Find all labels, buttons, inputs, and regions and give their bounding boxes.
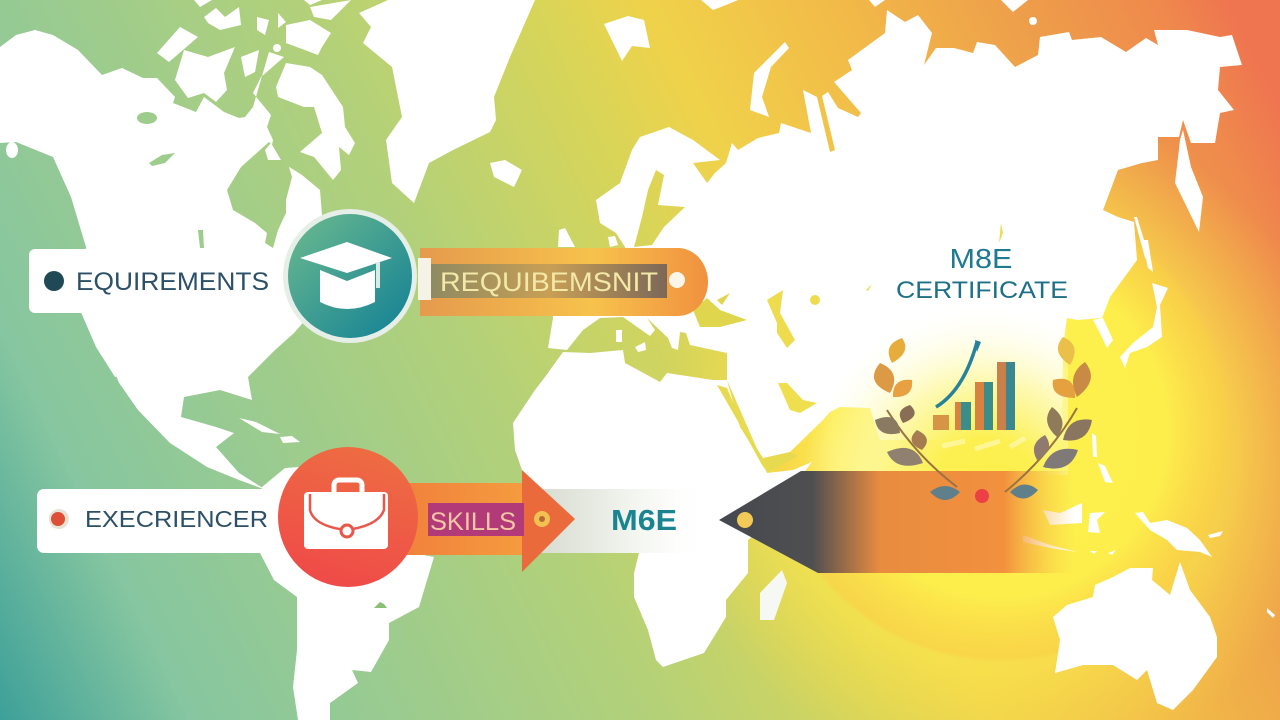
label: experience: EXECRIENCER [85, 506, 268, 532]
Greenland [359, 0, 535, 203]
icon: graduation cap [283, 209, 417, 343]
fade from cream to yellow under the heading [795, 305, 1068, 475]
row: experience [37, 447, 710, 587]
pale highlights above the tag [942, 438, 1025, 449]
yellow slivers by the heading [866, 223, 1003, 291]
New Guinea [1135, 512, 1212, 557]
icon: dot [44, 271, 64, 291]
Hudson Bay [227, 142, 292, 248]
laurel wreath [874, 337, 1092, 503]
label: equirements [29, 249, 299, 313]
certificate tag [719, 471, 1075, 573]
British Isles [558, 228, 618, 247]
label: experience [37, 489, 287, 553]
Arctic Russia islands [701, 0, 1037, 25]
right branch [1005, 337, 1092, 499]
North America [0, 30, 340, 490]
bar chart with trend arrow [933, 340, 1015, 430]
Africa [513, 350, 812, 667]
Baltic Sea [634, 170, 685, 247]
Australia [1053, 562, 1217, 710]
Black Sea and Azov [693, 293, 747, 327]
row: requirements [29, 209, 708, 343]
left branch [874, 338, 960, 500]
central yellow glow [768, 198, 1232, 662]
Iceland [490, 160, 522, 187]
Canadian Arctic islands [6, 0, 355, 180]
Kamchatka [1175, 130, 1203, 232]
Mediterranean islands [616, 330, 646, 352]
Madagascar [760, 570, 787, 620]
Caribbean islands [239, 418, 300, 443]
soft outer glow [660, 100, 1280, 720]
certificate heading [896, 243, 1068, 304]
Baja coast line [115, 377, 128, 410]
red centre dot [975, 489, 989, 503]
Eurasia [548, 10, 1242, 460]
Novaya Zemlya [750, 42, 789, 117]
eyelet [737, 512, 753, 528]
Japan and Sakhalin [1093, 217, 1168, 368]
South America [260, 465, 434, 720]
certificate heading: CERTIFICATE [896, 277, 1068, 304]
icon: briefcase [278, 447, 418, 587]
skills arrow [400, 470, 575, 572]
Caspian Sea [767, 290, 795, 348]
Red Sea and Gulf of Aden [717, 385, 798, 473]
icon: red dot [49, 509, 69, 529]
Persian Gulf [778, 383, 817, 413]
connector banner: requirement [418, 248, 708, 316]
Svalbard [604, 16, 650, 61]
connector banner: requirement: REQUIBEMSNIT [440, 267, 658, 297]
label: equirements: EQUIREMENTS [76, 268, 269, 296]
North American lakes [137, 112, 204, 248]
skills arrow: SKILLS [430, 508, 516, 536]
Southeast Asian islands [1023, 433, 1275, 618]
M6E arrow tail: M6E [611, 505, 677, 537]
Amazon detail [374, 602, 387, 608]
M6E arrow tail [540, 489, 710, 553]
certificate heading: M8E [950, 243, 1012, 274]
Aral Sea [810, 295, 820, 305]
